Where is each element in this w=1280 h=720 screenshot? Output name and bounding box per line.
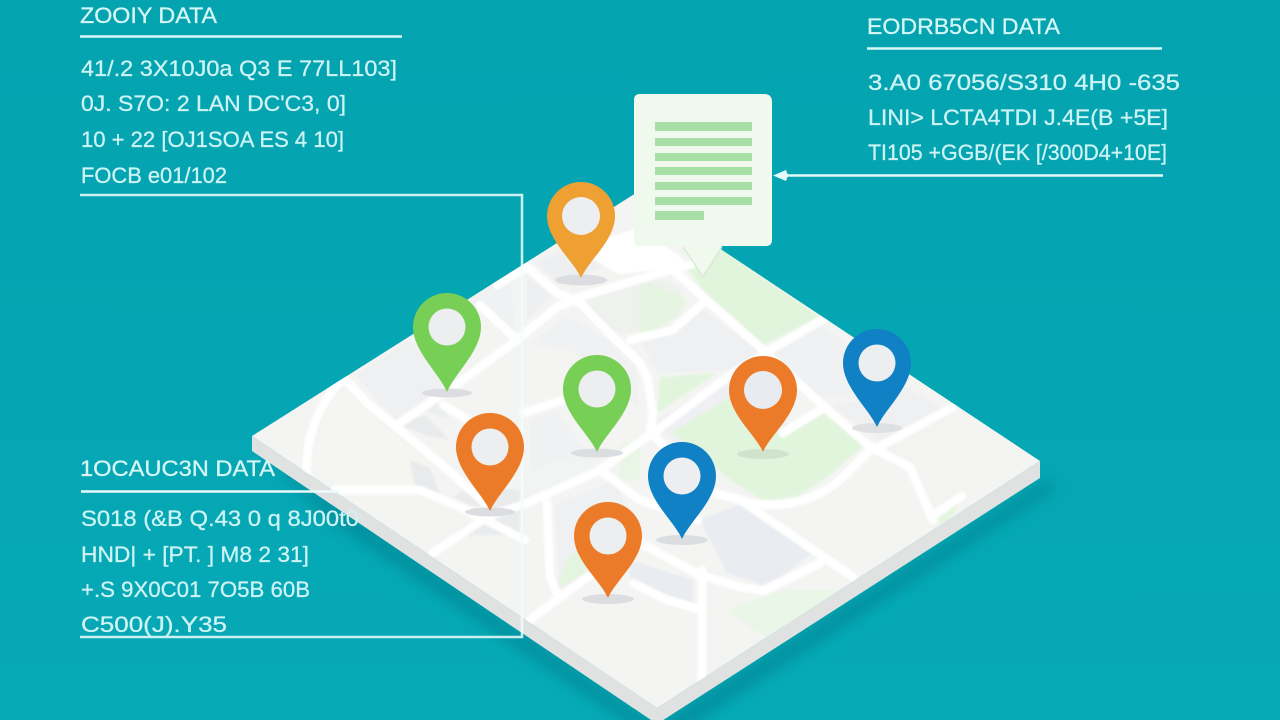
text block: S018 (&B Q.43 0 q 8J00t0: [81, 506, 359, 531]
pin: orange 3: [729, 356, 797, 459]
text block: HND| + [PT. ] M8 2 31]: [81, 542, 309, 567]
panel: zoom data: [80, 3, 402, 188]
panel: location data: [80, 456, 359, 637]
pin: orange 2: [574, 502, 642, 604]
text block: 41/.2 3X10J0a Q3 E 77LL103]: [81, 56, 397, 81]
arrow: to note: [773, 170, 1163, 181]
text block: C500(J).Y35: [81, 612, 227, 637]
text block: [81, 506, 359, 637]
text block: FOCB e01/102: [81, 163, 227, 188]
note text lines: [655, 122, 752, 220]
text block: 10 + 22 [OJ1SOA ES 4 10]: [81, 127, 344, 152]
text block: [868, 70, 1180, 165]
connector: left bracket: [80, 195, 522, 637]
map drop shadow: [262, 452, 1056, 720]
pin: green 1: [413, 293, 481, 398]
heading: 1OCAUC3N DATA: [80, 456, 275, 481]
pin: blue 2: [843, 329, 911, 433]
text block: 3.A0 67056/S310 4H0 -635: [868, 70, 1180, 95]
heading: ZOOIY DATA: [80, 3, 217, 28]
panel: source data: [867, 14, 1180, 165]
callout: note card: [634, 94, 772, 277]
map roads: [307, 232, 962, 680]
text block: 0J. S7O: 2 LAN DC'C3, 0]: [81, 91, 346, 116]
pin: orange 1: [456, 413, 524, 516]
text block: +.S 9X0C01 7O5B 60B: [81, 577, 310, 602]
heading: EODRB5CN DATA: [867, 14, 1060, 39]
map slab side: [252, 436, 1040, 720]
text block: [81, 56, 397, 188]
text block: TI105 +GGB/(EK [/300D4+10E]: [868, 140, 1167, 165]
map surface: [252, 193, 1040, 708]
map parks: [555, 250, 962, 640]
text block: LINI> LCTA4TDI J.4E(B +5E]: [868, 105, 1168, 130]
isometric map: [252, 193, 1056, 720]
map blocks: [405, 272, 810, 601]
pin: green 2: [563, 355, 631, 458]
pin: yellow-orange: [547, 182, 615, 286]
pin: blue 1: [648, 442, 716, 545]
